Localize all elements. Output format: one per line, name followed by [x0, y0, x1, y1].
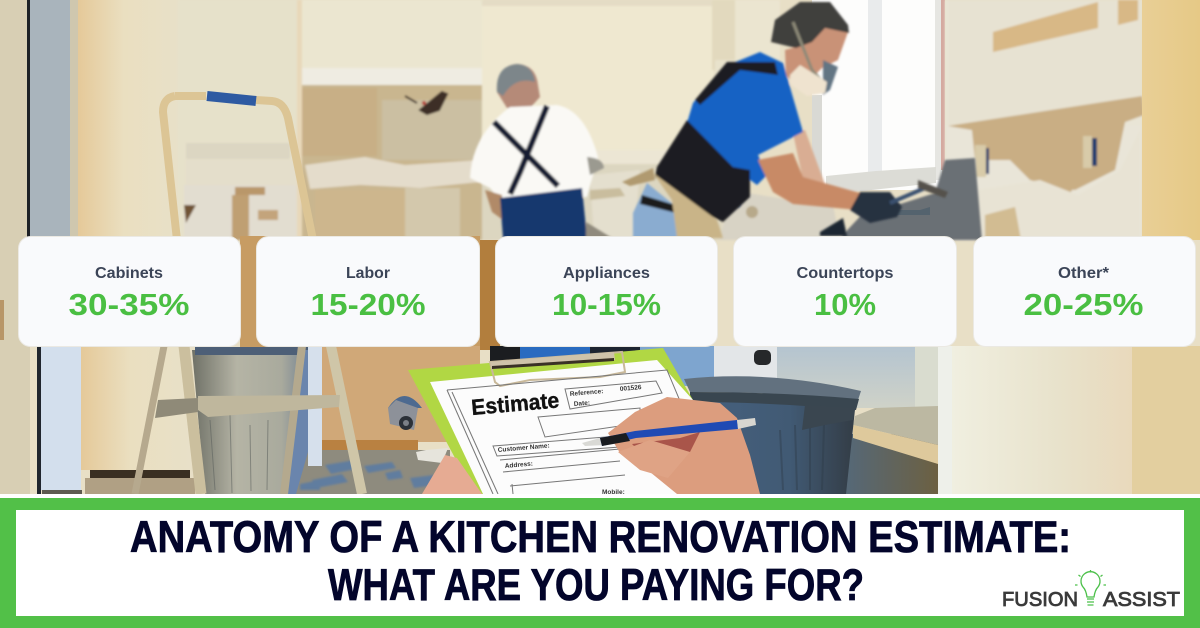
stripped plaster wall — [178, 0, 840, 240]
jeans and tool belt — [633, 183, 680, 238]
title text: WHAT ARE YOU PAYING FOR? — [328, 561, 864, 610]
tile splash area — [838, 158, 982, 240]
form field labels: Address: — [505, 461, 533, 470]
Fusion Assist logo: ASSIST — [1103, 589, 1180, 611]
hand and pen — [582, 397, 760, 494]
card: labor: Labor — [346, 265, 390, 282]
title text: ANATOMY OF A KITCHEN RENOVATION ESTIMATE: — [130, 513, 1071, 562]
wall wiring — [405, 92, 447, 114]
back brace and straps — [655, 120, 750, 222]
form field labels — [498, 384, 642, 496]
hair — [771, 2, 849, 48]
form field labels: Customer Name: — [498, 442, 550, 454]
cost cards row — [18, 236, 1196, 346]
paper form lines — [447, 370, 693, 494]
title text — [130, 513, 1071, 610]
stepladder — [135, 96, 362, 494]
card: labor — [256, 236, 480, 346]
clip — [490, 352, 625, 386]
card: cabinets — [18, 236, 240, 346]
bucket on the right — [684, 376, 861, 494]
rear arm — [793, 130, 827, 190]
plaster bucket — [192, 346, 322, 494]
forearm — [758, 153, 860, 210]
fingers holding clipboard — [422, 455, 482, 494]
floor debris and outlet box — [300, 396, 448, 490]
card: appliances — [496, 236, 718, 346]
gold side wall — [1142, 0, 1200, 240]
Fusion Assist logo: FUSION — [1002, 589, 1078, 611]
card: countertops: Countertops — [796, 265, 894, 282]
card: cabinets: Cabinets — [95, 265, 163, 282]
card: cabinets: 30-35% — [68, 287, 190, 322]
glove and hammer — [850, 192, 902, 223]
background photo: kitchen renovation scene — [0, 0, 1200, 494]
left door and wall — [0, 0, 195, 494]
card: other — [974, 236, 1196, 346]
card: countertops — [734, 236, 956, 346]
card: other: Other* — [1058, 265, 1110, 282]
worker in blue shirt — [622, 2, 948, 238]
respirator — [823, 60, 838, 95]
face and neck — [785, 28, 848, 90]
Fusion Assist logo — [1002, 570, 1180, 611]
clipboard with estimate form — [408, 348, 760, 496]
card: appliances: Appliances — [563, 265, 650, 282]
card: countertops: 10% — [814, 287, 876, 322]
form field labels: Reference: — [570, 388, 604, 398]
title banner — [0, 494, 1200, 628]
paper — [430, 360, 712, 494]
card: other: 20-25% — [1024, 287, 1144, 322]
right plaster wall — [945, 0, 1144, 240]
window — [812, 0, 945, 195]
blue shirt — [687, 52, 803, 185]
clipboard board — [408, 348, 700, 494]
form field labels: Mobile: — [602, 489, 625, 496]
form field labels: Date: — [574, 400, 590, 408]
worker in white shirt — [470, 64, 612, 238]
card: labor: 15-20% — [310, 287, 426, 322]
form field labels: 001526 — [620, 384, 642, 393]
wall and cabinet under the cards — [240, 236, 1200, 494]
icon: light bulb — [1075, 570, 1106, 605]
card: appliances: 10-15% — [552, 287, 661, 322]
estimate heading: Estimate — [470, 387, 560, 420]
